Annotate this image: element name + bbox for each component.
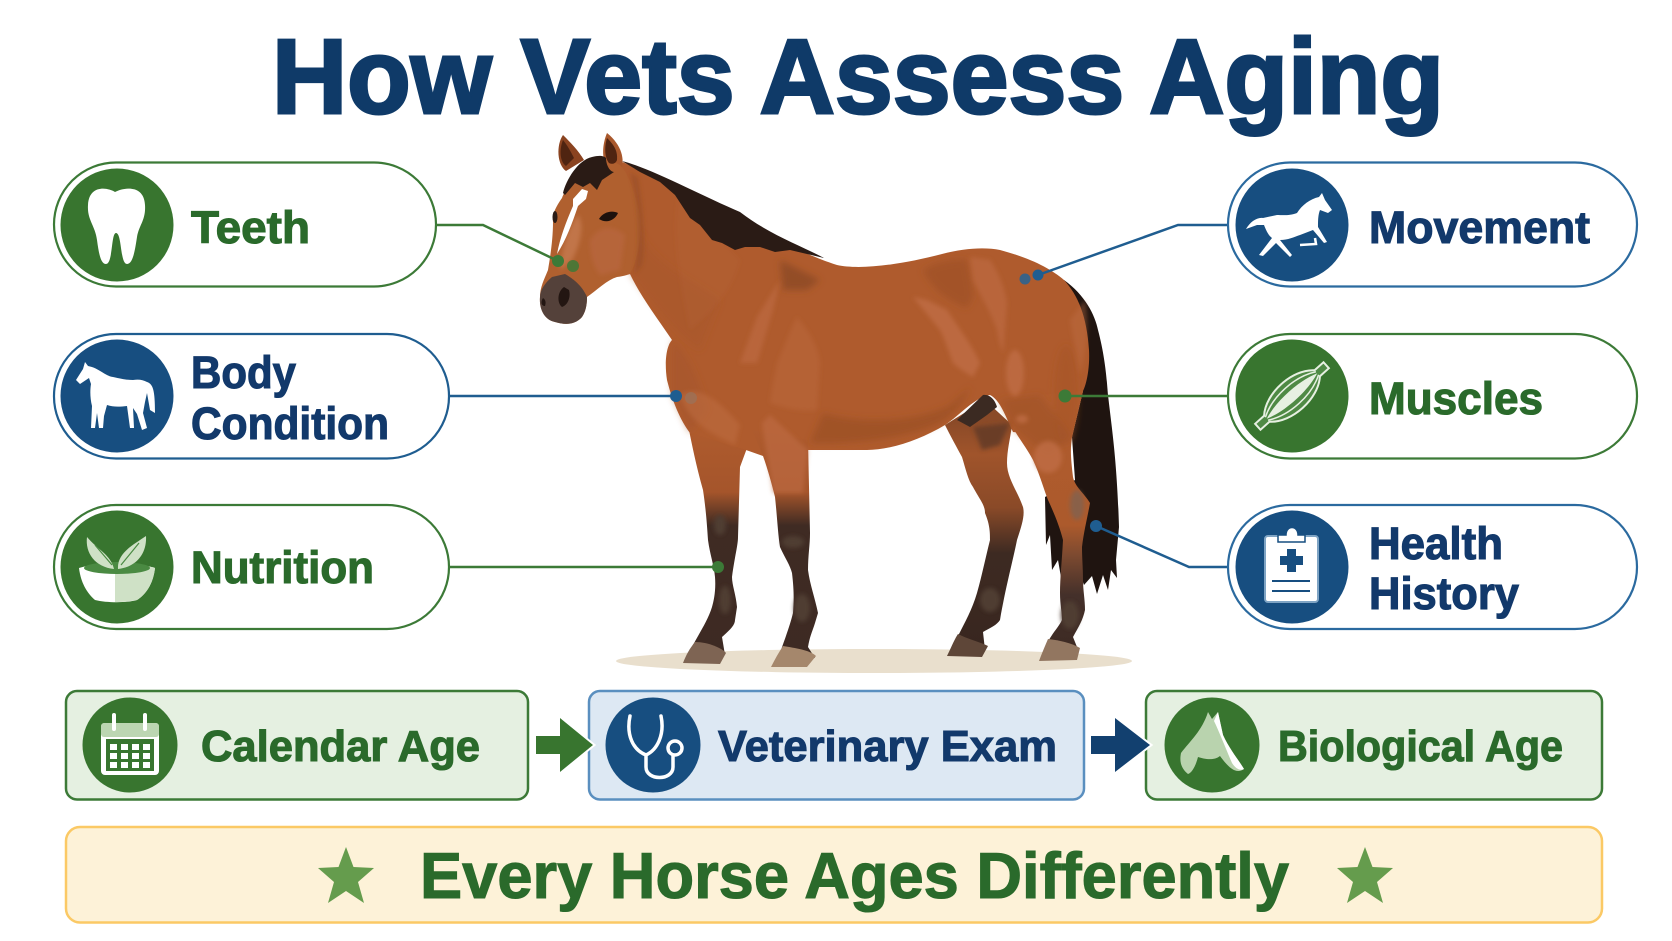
label: body condition <box>191 347 389 449</box>
banner text: Every Horse Ages Differently <box>420 839 1289 912</box>
coat shading <box>630 230 1078 455</box>
flank shadow <box>973 423 1010 450</box>
head shading <box>560 172 644 275</box>
body and neck <box>600 162 1089 456</box>
title: How Vets Assess Aging <box>272 18 1444 136</box>
far eye <box>552 211 558 223</box>
label: body condition: Condition <box>191 398 389 449</box>
mane <box>622 161 824 258</box>
label: nutrition: Nutrition <box>191 542 374 593</box>
ground shadow <box>616 649 1132 673</box>
arrow: exam to biological <box>1091 718 1150 772</box>
leg details <box>714 490 1084 629</box>
forelock <box>563 156 614 195</box>
label: movement: Movement <box>1369 202 1590 253</box>
near hind leg <box>1013 391 1090 652</box>
icon: calendar <box>82 698 178 792</box>
icon: horse head <box>1164 698 1260 792</box>
far fore hoof <box>683 642 726 664</box>
panel: nutrition <box>54 505 449 629</box>
connector: movement <box>1020 225 1227 284</box>
connector: teeth <box>436 225 579 272</box>
near hind hoof <box>1039 639 1080 661</box>
nostrils <box>542 287 570 307</box>
near fore leg <box>752 430 818 658</box>
label: muscles: Muscles <box>1369 373 1543 424</box>
right ear <box>603 133 623 171</box>
icon: clipboard <box>1236 510 1348 624</box>
panel: muscles <box>1212 316 1637 476</box>
icon: stethoscope <box>606 698 700 792</box>
connector: muscles <box>1058 390 1227 402</box>
label: health history: History <box>1369 568 1519 619</box>
head <box>540 158 641 324</box>
left ear <box>558 135 584 171</box>
arrow: calendar to exam <box>536 718 593 772</box>
far fore leg <box>688 425 750 655</box>
label: calendar age: Calendar Age <box>201 722 480 771</box>
panel: calendar age <box>66 691 528 800</box>
blaze <box>557 189 588 254</box>
connector: nutrition <box>449 561 724 573</box>
eye <box>599 212 618 221</box>
panel: body condition <box>54 334 449 458</box>
icon: tooth <box>60 168 174 282</box>
icon: muscle <box>1212 316 1372 476</box>
panel: biological age <box>1146 691 1602 800</box>
panel: health history <box>1228 505 1637 629</box>
sheath <box>957 395 997 427</box>
far hind leg <box>945 400 1024 650</box>
coat highlights <box>676 190 1087 493</box>
inner ears <box>561 138 617 166</box>
panel: movement <box>1228 162 1637 286</box>
label: health history: Health <box>1369 518 1503 569</box>
horse illustration <box>540 133 1132 673</box>
label: biological age: Biological Age <box>1278 722 1563 771</box>
icon: horse <box>60 340 174 452</box>
label: body condition: Body <box>191 347 296 398</box>
tail <box>1045 280 1119 594</box>
label: teeth: Teeth <box>191 202 310 253</box>
banner: every horse ages differently <box>66 827 1602 922</box>
icon: right star <box>1337 847 1393 903</box>
label: veterinary exam: Veterinary Exam <box>718 722 1057 771</box>
panel: veterinary exam <box>589 691 1084 800</box>
panel: teeth <box>54 162 436 286</box>
connector: body condition <box>449 390 697 404</box>
icon: left star <box>318 847 374 903</box>
muzzle <box>540 274 587 324</box>
icon: galloping horse <box>1236 168 1348 282</box>
far hind hoof <box>947 634 988 657</box>
icon: bowl <box>60 510 174 624</box>
label: health history <box>1369 518 1519 619</box>
near fore hoof <box>771 646 816 667</box>
connector: health history <box>1090 520 1227 567</box>
